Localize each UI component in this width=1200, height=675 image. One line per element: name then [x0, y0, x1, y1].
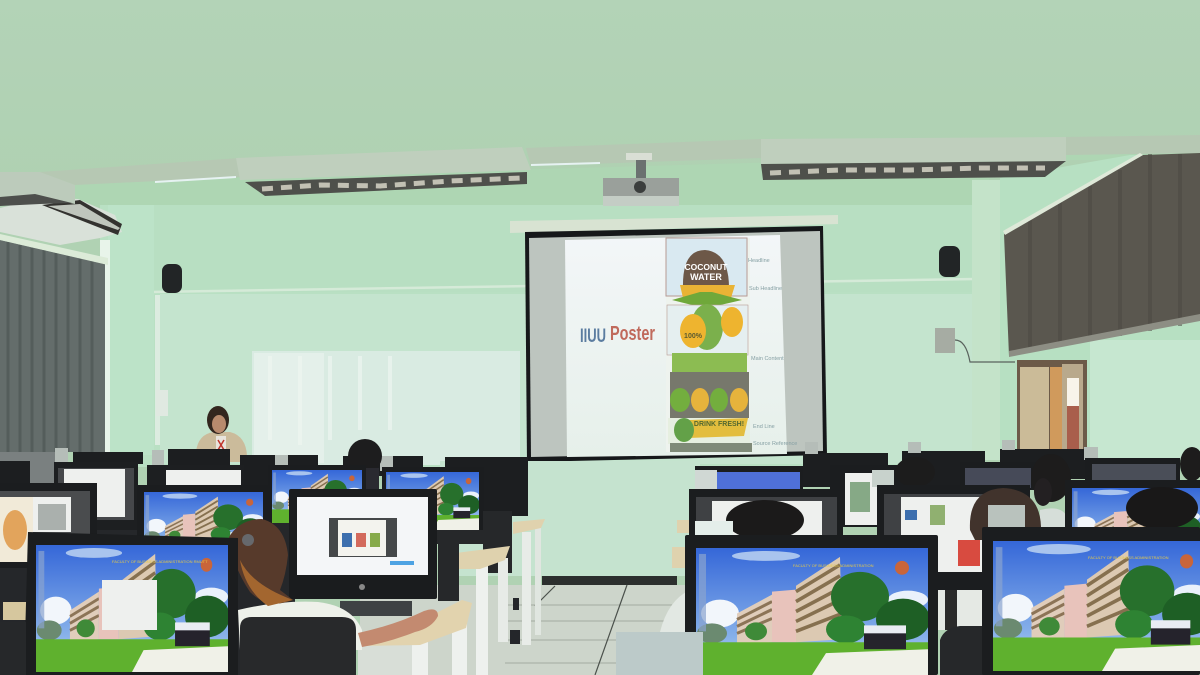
chair: right centre student	[940, 626, 985, 675]
chair: woman student	[240, 617, 356, 675]
monitor: front right wallpaper	[982, 527, 1200, 675]
slide labels: Source Reference	[753, 441, 797, 447]
monitor: front centre wallpaper	[685, 535, 938, 675]
monitor: front left wallpaper: FACULTY OF BUSINESS ADMINISTRATION RMUTT	[112, 559, 208, 564]
presenter	[196, 406, 247, 462]
monitor: webpage with woman	[289, 489, 437, 599]
back row black monitors	[0, 449, 1085, 516]
poster on slide: DRINK FRESH!	[694, 421, 744, 428]
keyboard	[340, 601, 412, 616]
front desk	[358, 600, 472, 675]
whiteboard	[252, 351, 520, 465]
left window curtain	[0, 234, 108, 452]
electrical box	[935, 328, 1015, 362]
door	[1017, 360, 1087, 452]
wall switch	[156, 390, 168, 416]
slide labels: End Line	[753, 424, 775, 430]
monitor: row 2 document right-centre	[689, 489, 843, 540]
slide labels: Main Content	[751, 356, 784, 362]
ceiling light right	[761, 137, 1066, 180]
poster on slide: 100%	[684, 333, 703, 340]
desk middle	[456, 546, 520, 675]
student: long hair right centre	[938, 488, 1041, 630]
monitor: front right wallpaper: FACULTY OF BUSINESS ADMINISTRATION	[1088, 555, 1169, 560]
poster on slide: WATER	[690, 272, 722, 282]
desk right back	[483, 511, 545, 645]
soffit underside	[60, 150, 1200, 208]
base shadows behind left monitors	[0, 520, 295, 675]
far desks right side	[672, 520, 691, 568]
privacy tab foreground	[616, 632, 703, 675]
monitor: front centre wallpaper: FACULTY OF BUSINESS ADMINISTRATION	[793, 563, 874, 568]
projection screen	[525, 226, 827, 462]
student: far right head	[1180, 447, 1200, 481]
monitor: row 2 wallpaper far right	[1065, 480, 1200, 558]
poster on slide: COCONUT	[685, 262, 728, 272]
floor	[360, 585, 685, 675]
monitor privacy tabs	[55, 440, 1098, 471]
monitor: row 3 centre-left	[147, 465, 244, 495]
lower wall under screen	[440, 461, 700, 576]
speaker right	[939, 246, 960, 277]
chair back centre-left	[438, 538, 459, 601]
poster on slide	[666, 238, 752, 452]
student: back of head centre-left	[348, 439, 382, 490]
slide title accent: Poster	[610, 323, 655, 345]
air conditioner	[0, 172, 122, 245]
far left tan desk	[3, 602, 27, 620]
monitor: front left wallpaper	[24, 532, 238, 675]
slide labels: Headline	[748, 258, 770, 264]
far left chair edge	[0, 622, 26, 675]
screen housing	[510, 215, 838, 233]
slide title: IIUU	[580, 326, 606, 347]
projector	[603, 153, 679, 206]
monitor: row 2 wallpaper left	[137, 485, 270, 558]
soffit beam	[40, 135, 1200, 185]
upper ceiling	[0, 0, 1200, 185]
monitor: blue screen back	[695, 466, 803, 490]
monitor: row 2 wallpaper centre	[268, 465, 366, 523]
slide labels: Sub Headline	[749, 286, 782, 292]
monitor: dark screen back right	[960, 462, 1040, 490]
student: man with mask	[1031, 454, 1071, 530]
monitor: document back centre	[830, 457, 935, 527]
monitor: row 2 open book	[877, 485, 1030, 590]
student shoulder left of front monitor	[660, 590, 690, 632]
slide labels	[748, 258, 797, 447]
baseboard	[542, 576, 677, 585]
woman student	[229, 519, 438, 650]
monitor: row 3 left	[54, 462, 138, 530]
monitor: row 2 wallpaper right	[382, 467, 484, 544]
speaker left	[162, 264, 182, 293]
monitor: dark screen far right	[1085, 458, 1180, 482]
monitor: row 2 far left	[0, 483, 97, 568]
back wall	[100, 155, 1200, 470]
ceiling light left	[236, 147, 531, 196]
right wall curtain	[1003, 153, 1200, 357]
